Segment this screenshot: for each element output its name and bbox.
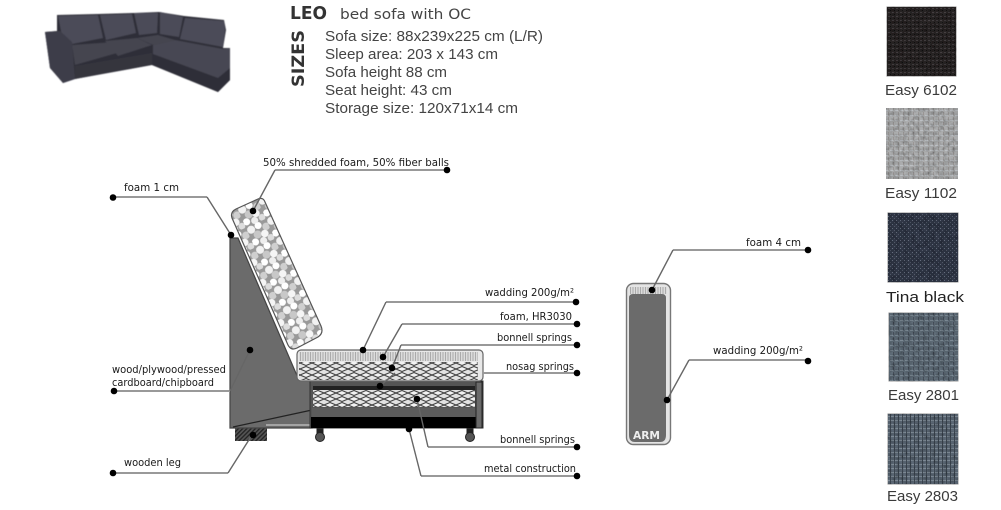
arm cross-section <box>626 284 670 444</box>
swatch: Easy 2801: Easy 2801 <box>888 387 959 404</box>
swatch: Easy 1102 <box>885 108 958 202</box>
label: bonnell springs lower <box>414 396 580 450</box>
swatch: Tina black <box>886 212 965 306</box>
back cushion <box>232 198 322 349</box>
label: wadding arm <box>664 345 811 403</box>
label: nosag springs: nosag springs <box>506 361 574 373</box>
label: bonnell springs upper: bonnell springs <box>497 332 572 344</box>
casters <box>316 426 474 442</box>
label: metal construction: metal construction <box>484 463 576 475</box>
label: wadding seat: wadding 200g/m² <box>485 287 574 299</box>
chaise front <box>152 55 230 92</box>
label: foam 1 cm <box>110 182 234 238</box>
swatch: Easy 6102: Easy 6102 <box>885 82 957 99</box>
back cushions <box>58 12 225 47</box>
seat cushions <box>72 35 175 65</box>
arm core <box>629 294 666 442</box>
title: bed sofa with OC <box>340 7 471 23</box>
label: wooden leg: wooden leg <box>124 457 181 469</box>
label: foam 1 cm: foam 1 cm <box>124 182 179 194</box>
arm text: ARM <box>633 429 660 442</box>
label: shredded foam <box>250 157 450 214</box>
label: foam 4 cm: foam 4 cm <box>746 237 801 249</box>
sofa cross-section <box>230 198 483 442</box>
seat base front <box>75 53 152 79</box>
label: nosag springs <box>377 361 580 389</box>
swatch: Easy 2801 <box>888 312 959 404</box>
sizes list: Storage size: 120x71x14 cm <box>325 101 518 117</box>
title <box>290 3 471 24</box>
label: wadding arm: wadding 200g/m² <box>713 345 803 357</box>
label: metal construction <box>406 426 580 479</box>
sizes heading: SIZES <box>289 30 309 87</box>
label: wadding seat <box>360 287 579 353</box>
label: shredded foam: 50% shredded foam, 50% fiber balls <box>263 157 449 169</box>
sofa silhouette <box>45 12 230 92</box>
label: wood frame: wood/plywood/pressed <box>112 364 226 376</box>
sizes list: Sofa size: 88x239x225 cm (L/R) <box>325 29 543 45</box>
label: foam HR3030 <box>380 311 580 360</box>
sizes list <box>325 29 543 117</box>
product photo: corner sofa <box>45 12 230 92</box>
swatch: Easy 1102: Easy 1102 <box>885 185 957 202</box>
back panel <box>230 238 312 428</box>
title: LEO <box>290 3 327 24</box>
label: wooden leg <box>110 432 256 476</box>
label: foam HR3030: foam, HR3030 <box>500 311 572 323</box>
sizes list: Sofa height 88 cm <box>325 65 447 81</box>
chaise top <box>153 40 230 78</box>
sizes list: Seat height: 43 cm <box>325 83 452 99</box>
label: wood frame: cardboard/chipboard <box>112 377 214 389</box>
swatch: Tina black: Tina black <box>886 289 965 306</box>
swatch: Easy 2803 <box>887 414 958 505</box>
label: bonnell springs upper <box>389 332 580 371</box>
wooden leg <box>235 428 267 441</box>
arm foam <box>630 287 667 294</box>
base frame <box>310 381 483 428</box>
label: bonnell springs lower: bonnell springs <box>500 434 575 446</box>
label: wood frame <box>111 347 253 394</box>
sizes list: Sleep area: 203 x 143 cm <box>325 47 498 63</box>
swatch: Easy 6102 <box>885 6 957 99</box>
seat cushion <box>297 350 483 381</box>
left arm <box>45 31 75 83</box>
swatch: Easy 2803: Easy 2803 <box>887 488 958 505</box>
label: foam 4 cm <box>649 237 811 293</box>
